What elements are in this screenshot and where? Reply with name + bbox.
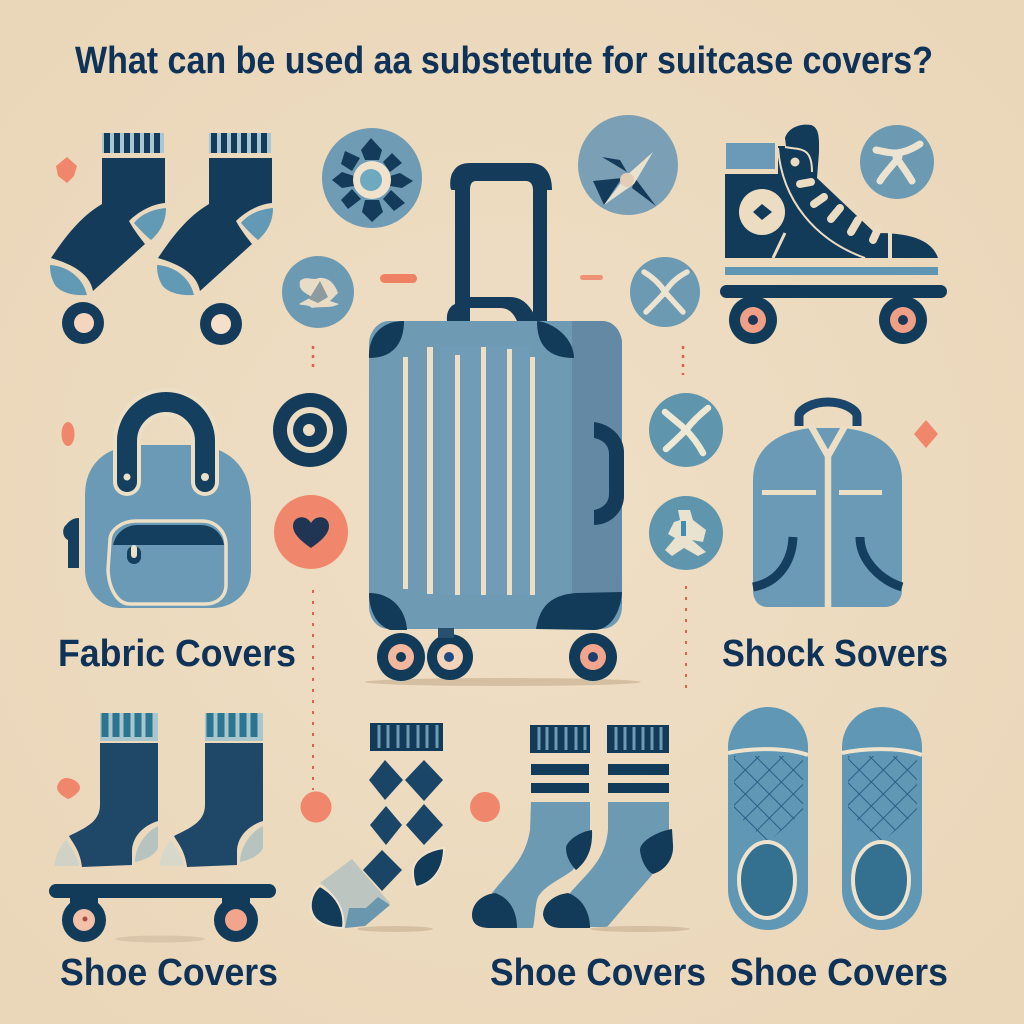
backpack body: [85, 445, 251, 608]
ribs: [403, 347, 535, 595]
boot collar: [726, 143, 775, 169]
dotted connector lower left: [312, 590, 314, 790]
dash: coral left: [380, 274, 417, 283]
icon: argyle sock: [311, 723, 444, 932]
diamonds: [363, 760, 443, 891]
sock right: [159, 713, 263, 867]
telescopic handle: [447, 163, 552, 321]
backpack handle: [127, 402, 205, 482]
skate wheels: [729, 296, 927, 344]
label: shoe covers right: Shoe Covers: [730, 952, 948, 994]
icon: top-left socks on wheels: [50, 133, 273, 345]
skateboard deck: [49, 884, 276, 898]
dotted connector lower right: [685, 586, 687, 695]
right sock: [157, 133, 273, 295]
icon: plane circle mid right: [649, 393, 723, 467]
label: shoe covers left: Shoe Covers: [60, 952, 278, 994]
boot: [725, 125, 938, 258]
dotted connector upper left: [312, 346, 314, 370]
icon: slippers: [728, 707, 922, 930]
right striped sock: [543, 725, 673, 928]
icon: high-top roller skate: [720, 125, 947, 344]
handle rivets: [124, 473, 209, 481]
icon: target ring: [273, 393, 347, 467]
sock left: [54, 713, 158, 867]
side grip: [594, 422, 624, 525]
handle outline: [127, 402, 205, 482]
title: What can be used aa substetute for suitcase covers?: [75, 40, 933, 82]
boot seams and laces: [773, 147, 890, 259]
pocket flap: [113, 525, 224, 545]
pockets: [753, 537, 902, 587]
icon: small plane circle top right: [860, 125, 934, 199]
dotted connector upper right: [682, 346, 684, 375]
centre highlight: [440, 345, 530, 595]
front pocket: [108, 521, 226, 604]
collar and placket: [811, 426, 845, 607]
icon: striped socks: [472, 725, 690, 932]
skate plate: [720, 285, 947, 298]
board shadow: [115, 936, 205, 942]
ankle eyelet and patch: [739, 158, 800, 235]
jacket body: [753, 428, 902, 607]
wheels: [62, 302, 242, 345]
foot shadow: [357, 926, 433, 932]
right slipper: [842, 707, 922, 930]
left sock: [50, 133, 166, 295]
toe: [311, 886, 343, 928]
side tab: [63, 518, 79, 568]
icon: plane circle upper right: [630, 257, 700, 327]
foot grey: [320, 859, 390, 928]
icon: blob circle: [282, 256, 354, 328]
dash: coral right: [580, 275, 603, 280]
heel: [413, 848, 444, 887]
icon: heart circle: [274, 495, 348, 569]
icon: figure circle: [649, 496, 723, 570]
label: shoe covers centre: Shoe Covers: [490, 952, 706, 994]
icon: backpack: [63, 402, 251, 608]
icon: flower circle: [322, 128, 422, 228]
cuff: [370, 723, 443, 751]
ground shadow: [365, 678, 641, 686]
icon: bottom-left socks on skateboard: [49, 713, 276, 942]
suitcase wheels: [377, 628, 617, 681]
case body: [369, 321, 622, 629]
label: fabric covers: Fabric Covers: [58, 633, 296, 675]
sock shadow: [590, 926, 690, 932]
icon: propeller circle: [578, 115, 678, 215]
coral markers: [56, 157, 938, 822]
left slipper: [728, 707, 808, 930]
skateboard wheels: [62, 896, 258, 942]
foot blue: [345, 897, 390, 928]
sole stripe: [725, 267, 938, 275]
suitcase: [365, 163, 641, 686]
zipper pull: [127, 545, 141, 564]
left striped sock: [472, 725, 592, 928]
corners: [369, 321, 622, 630]
jacket handle: [799, 402, 857, 426]
chest seams: [762, 490, 882, 495]
icon: garment jacket: [753, 402, 902, 607]
darker side panel: [572, 321, 622, 604]
label: shock sovers: Shock Sovers: [722, 633, 948, 675]
